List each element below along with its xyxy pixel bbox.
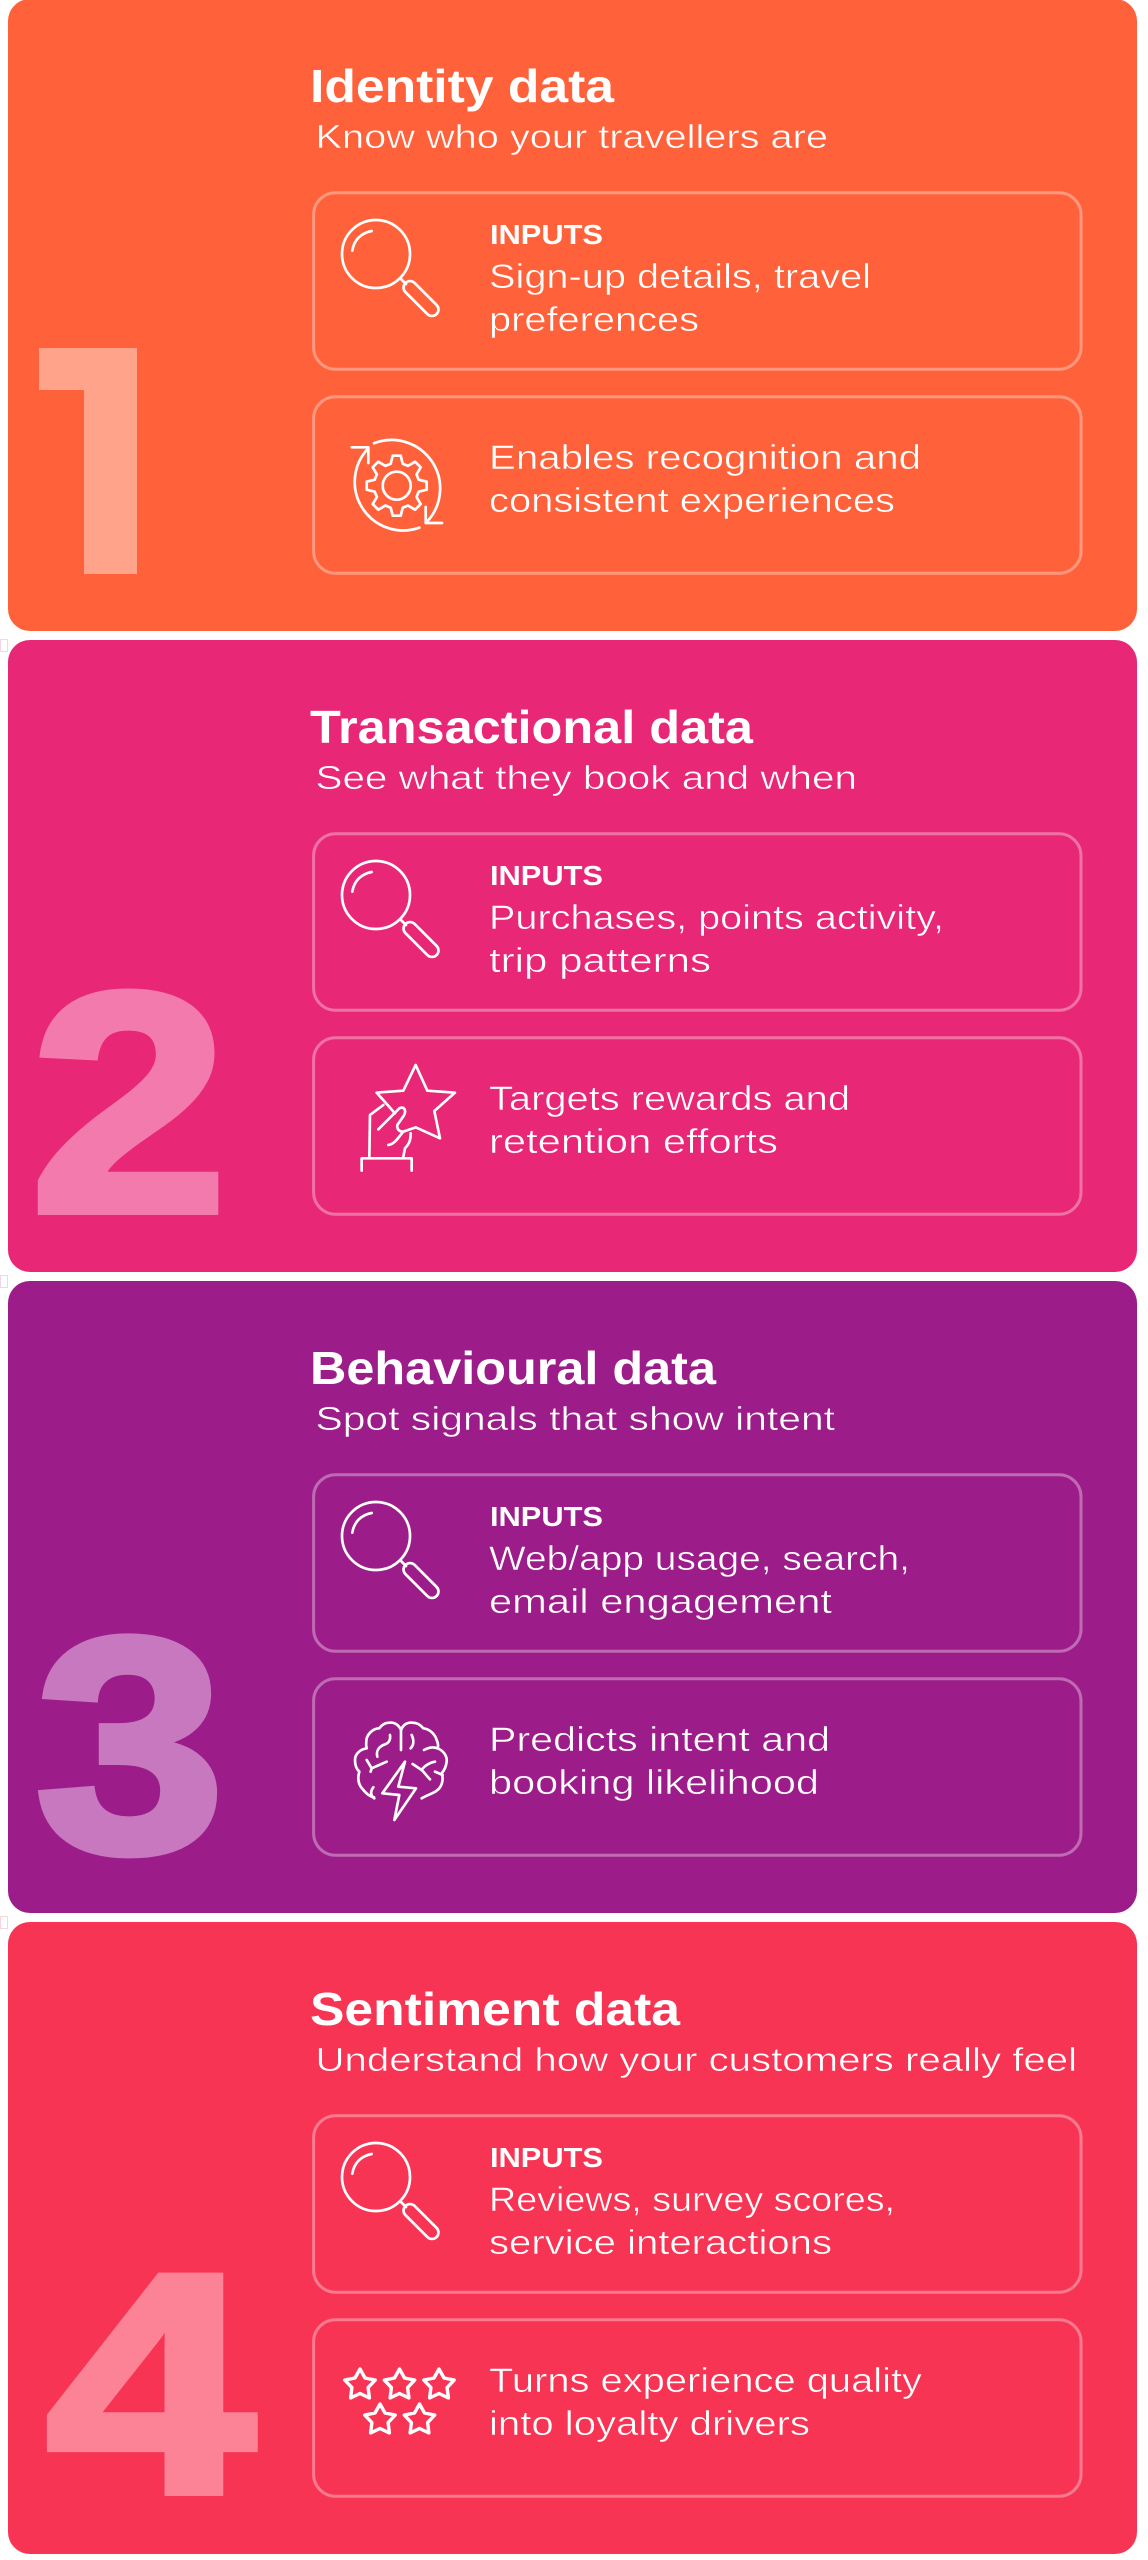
inputs card (314, 1475, 1081, 1651)
outcome text (489, 2362, 922, 2443)
title: Identity data (310, 60, 614, 112)
subtitle: Understand how your customers really feel (316, 2042, 1077, 2079)
outcome card (314, 397, 1081, 573)
inputs text: INPUTS (490, 219, 603, 250)
title: Sentiment data (310, 1983, 680, 2035)
inputs text: email engagement (489, 1583, 833, 1621)
inputs text: Sign-up details, travel (489, 258, 871, 296)
panel 2: transactional data (8, 640, 1137, 1278)
inputs text (489, 219, 871, 339)
outcome text: retention efforts (489, 1123, 778, 1161)
outcome text: Enables recognition and (489, 439, 921, 477)
inputs text: Web/app usage, search, (489, 1540, 910, 1578)
icon: brain with bolt (355, 1723, 447, 1820)
outcome text: Turns experience quality (489, 2362, 922, 2400)
number 3: 3 (35, 1574, 225, 1916)
number 1: 1 (11, 288, 194, 637)
icon: magnifier (342, 1502, 441, 1601)
icon: magnifier (342, 861, 441, 960)
icon: magnifier (342, 2143, 441, 2242)
outcome text: booking likelihood (489, 1764, 819, 1802)
inputs text: Purchases, points activity, (489, 899, 944, 937)
inputs text: service interactions (489, 2224, 832, 2262)
icon: hand holding star (362, 1065, 455, 1171)
inputs card (314, 834, 1081, 1010)
inputs text: trip patterns (489, 942, 711, 980)
number 4: 4 (46, 2210, 257, 2559)
outcome text: consistent experiences (489, 482, 895, 520)
number 2: 2 (30, 929, 228, 1278)
panel 3: behavioural data (8, 1281, 1137, 1916)
inputs text: INPUTS (490, 1501, 603, 1532)
subtitle: Know who your travellers are (316, 119, 828, 156)
title: Transactional data (310, 701, 753, 753)
subtitle: Spot signals that show intent (316, 1401, 836, 1438)
icon: gear cycle (352, 440, 442, 530)
inputs text: Reviews, survey scores, (489, 2181, 895, 2219)
outcome text: into loyalty drivers (489, 2405, 810, 2443)
inputs text: INPUTS (490, 2142, 603, 2173)
panel 1: identity data (8, 0, 1137, 637)
outcome text: Targets rewards and (489, 1080, 850, 1118)
title: Behavioural data (310, 1342, 716, 1394)
inputs text (489, 860, 944, 980)
outcome text (489, 1080, 850, 1161)
outcome text: Predicts intent and (489, 1721, 830, 1759)
outcome text (489, 1721, 830, 1802)
inputs text (489, 2142, 895, 2262)
outcome card (314, 1679, 1081, 1855)
panel 4: sentiment data (8, 1922, 1137, 2559)
outcome card (314, 1038, 1081, 1214)
inputs text: preferences (489, 301, 699, 339)
outcome text (489, 439, 921, 520)
inputs card (314, 193, 1081, 369)
number 1 (39, 348, 137, 574)
icon: magnifier (342, 220, 441, 319)
subtitle: See what they book and when (316, 760, 857, 797)
inputs card (314, 2116, 1081, 2292)
icon: five stars (345, 2369, 454, 2433)
inputs text (489, 1501, 910, 1621)
inputs text: INPUTS (490, 860, 603, 891)
outcome card (314, 2320, 1081, 2496)
